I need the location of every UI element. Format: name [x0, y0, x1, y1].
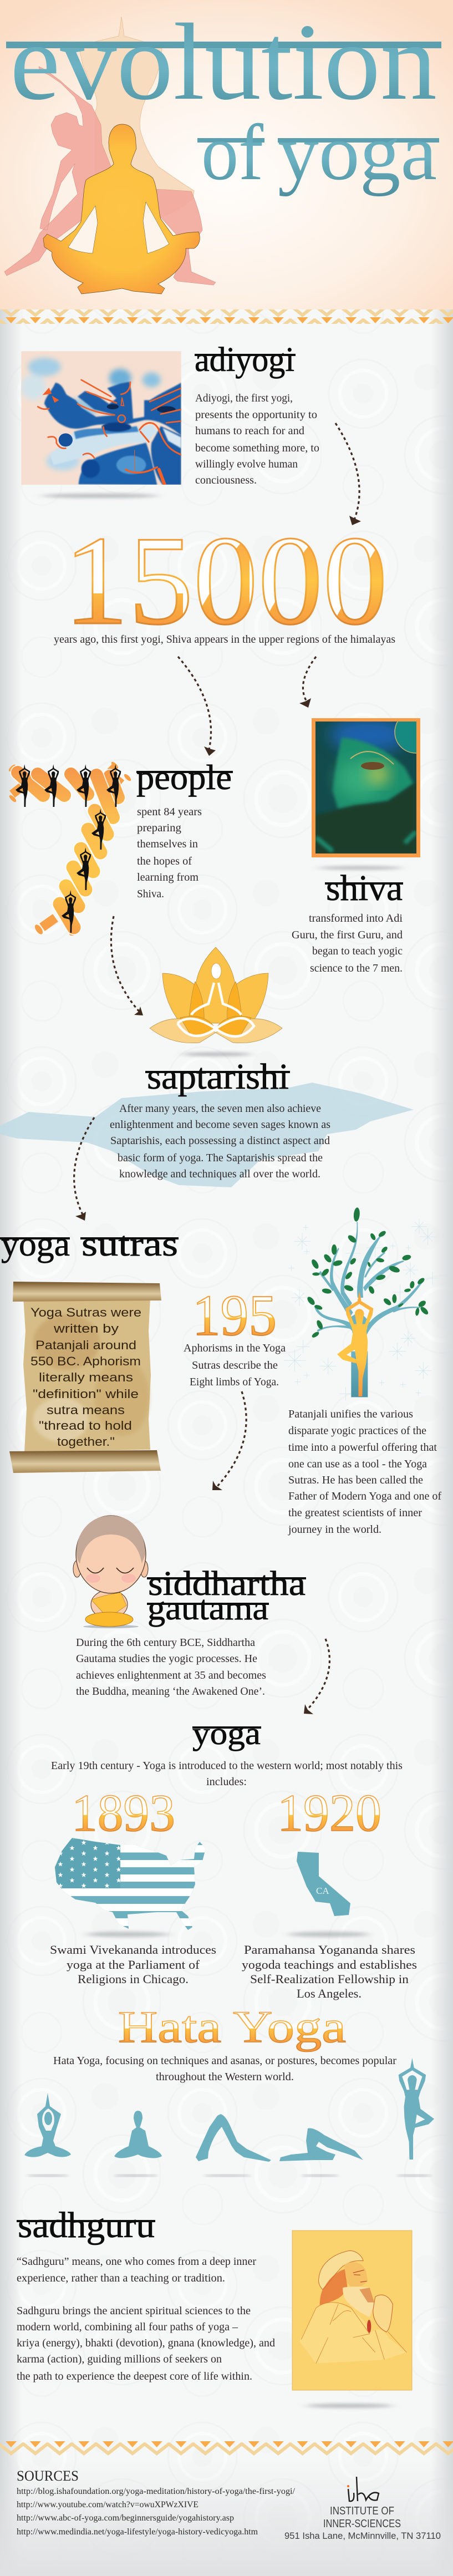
text: adiyogi description: humans to reach for and: [195, 425, 304, 437]
text: yoga intro: includes:: [206, 1776, 247, 1788]
title: of yoga: [197, 109, 439, 197]
text: patanjali description: Sutras. He has been called the: [288, 1474, 423, 1486]
text: adiyogi description: conciousness.: [195, 474, 257, 486]
heading: people: people: [136, 758, 232, 797]
text: shiva description: began to teach yogic: [312, 945, 403, 957]
text: vivekananda: yoga at the Parliament of: [67, 1958, 200, 1972]
text: yogananda: Paramahansa Yogananda shares: [244, 1943, 415, 1957]
scroll text: Patanjali around: [35, 1338, 136, 1352]
text: vivekananda: [50, 1943, 216, 1986]
arrow: to siddhartha: [212, 1391, 246, 1490]
heading: yoga sutras: yoga: [1, 1226, 70, 1263]
scroll text: "thread to hold: [39, 1419, 132, 1432]
text: saptarishi description: enlightenment and become seven sages known as: [110, 1119, 330, 1131]
scroll text: literally means: [39, 1370, 133, 1384]
title: Evolution: evolution: [10, 1, 437, 123]
scroll text: Yoga Sutras were: [30, 1305, 141, 1319]
zigzag divider top: [0, 309, 453, 324]
text: shiva description: transformed into Adi: [309, 912, 403, 924]
text: patanjali description: journey in the world.: [288, 1523, 381, 1536]
caption: 15000: years ago, this first yogi, Shiva appears in the upper regions of the himalayas: [54, 633, 395, 646]
stat: 195: 195: [192, 1283, 277, 1348]
text: yoga intro: [51, 1760, 403, 1788]
logo: isha institute: [284, 2477, 441, 2541]
icon: tree pose figure with sparkles: [284, 1207, 439, 1400]
text: sadhguru description: experience, rather than a teaching or tradition.: [17, 2272, 225, 2284]
scroll text: sutra means: [47, 1403, 125, 1417]
stat: 1893: 1893: [72, 1784, 175, 1842]
text: institute address: 951 Isha Lane, McMinnville, TN 37110: [284, 2531, 441, 2541]
scroll text: "definition" while: [33, 1387, 139, 1401]
text: siddhartha description: Gautama studies the yogic processes. He: [76, 1653, 257, 1665]
icon: california map: [297, 1852, 350, 1916]
icon: meditating monk: [73, 1516, 148, 1628]
text: yogananda: [242, 1943, 417, 2000]
text: adiyogi description: presents the opportunity to: [195, 409, 317, 421]
zigzag divider bottom: [0, 2441, 453, 2456]
shadow: [319, 866, 402, 870]
text: people description: the hopes of: [137, 855, 192, 867]
text: yogananda: Self-Realization Fellowship in: [250, 1972, 409, 1986]
text: sadhguru description: the path to experience the deepest core of life within.: [17, 2370, 252, 2382]
text: shiva description: science to the 7 men.: [310, 962, 403, 974]
text: sadhguru description: “Sadhguru” means, one who comes from a deep inner: [17, 2255, 256, 2268]
text: siddhartha description: [76, 1637, 266, 1698]
text: source links: http://www.abc-of-yoga.com/beginnersguide/yogahistory.asp: [17, 2513, 234, 2523]
portrait: sadhguru sketch: [292, 2230, 412, 2390]
text: aphorisms caption: Aphorisms in the Yoga: [184, 1342, 286, 1354]
panel: yoga sutras: [0, 1207, 441, 1536]
shadow california: [288, 1932, 368, 1937]
text: people description: spent 84 years: [137, 806, 202, 818]
header panel: [0, 0, 453, 309]
heading: siddhartha: siddhartha: [148, 1565, 306, 1603]
brush stroke background: [0, 1083, 414, 1187]
scroll text: 550 BC. Aphorism: [30, 1354, 141, 1368]
icon: isha script mark: [347, 2477, 379, 2501]
text: people description: learning from: [137, 871, 198, 883]
heading: sadhguru: sadhguru: [18, 2205, 155, 2245]
shadows under poses: [27, 2174, 432, 2177]
heading: yoga sutras: [0, 1226, 179, 1263]
icon: california map: CA: [316, 1886, 329, 1896]
text: patanjali description: disparate yogic practices of the: [288, 1425, 426, 1437]
title: of yoga: of: [201, 109, 263, 197]
panel: hata yoga: [24, 2001, 434, 2177]
shadow: [42, 494, 158, 498]
text: shiva description: [292, 912, 403, 974]
arrow: adiyogi to 15000: [335, 423, 361, 525]
scroll text: written by: [53, 1322, 119, 1335]
text: source links: http://blog.ishafoundation.org/yoga-meditation/history-of-yoga/the-first-yogi/: [17, 2487, 296, 2496]
scroll: [9, 1282, 161, 1473]
text: aphorisms caption: [184, 1342, 286, 1388]
yoga figures illustration: [4, 17, 216, 294]
text: yogananda: yogoda teachings and establishes: [242, 1958, 417, 1972]
text: saptarishi description: After many years, the seven men also achieve: [119, 1102, 321, 1115]
text: sadhguru description: [17, 2255, 275, 2382]
icon: lotus logo: [150, 947, 282, 1043]
text: hata yoga description: Hata Yoga, focusing on techniques and asanas, or postures, becomes popular: [53, 2055, 396, 2067]
icon: usa flag map: [55, 1838, 209, 1930]
panel: sources: [17, 2468, 296, 2537]
text: institute address: [284, 2505, 441, 2541]
text: siddhartha description: During the 6th century BCE, Siddhartha: [76, 1637, 255, 1649]
text: people description: Shiva.: [137, 888, 164, 900]
text: aphorisms caption: Eight limbs of Yoga.: [190, 1376, 279, 1388]
panel: saptarishi: [110, 947, 330, 1180]
panel: adiyogi: [21, 341, 319, 498]
text: saptarishi description: Saptarishis, each possessing a distinct aspect and: [110, 1135, 330, 1147]
arrow: to shiva: [299, 657, 316, 708]
text: adiyogi description: become something more, to: [195, 442, 319, 454]
stat: 1920: 1920: [277, 1784, 381, 1842]
text: sadhguru description: modern world, combining all four paths of yoga –: [17, 2321, 238, 2333]
text: people description: themselves in: [137, 838, 198, 850]
text: institute address: INSTITUTE OF: [330, 2505, 394, 2517]
text: yoga intro: Early 19th century - Yoga is introduced to the western world; most notably this: [51, 1760, 403, 1772]
arrow: to people: [178, 657, 216, 756]
icon: yoga poses: [24, 2058, 434, 2162]
text: patanjali description: one can use as a tool - the Yoga: [288, 1458, 427, 1470]
heading: sources: SOURCES: [17, 2468, 79, 2484]
text: patanjali description: Father of Modern Yoga and one of: [288, 1490, 441, 1502]
text: aphorisms caption: Sutras describe the: [192, 1359, 278, 1371]
text: siddhartha description: achieves enlightenment at 35 and becomes: [76, 1669, 266, 1681]
shadow: [182, 1053, 251, 1056]
scroll text: [30, 1305, 141, 1449]
heading: hata yoga: Hata Yoga: [118, 2001, 346, 2052]
text: hata yoga description: throughout the Western world.: [156, 2071, 294, 2083]
text: saptarishi description: [110, 1102, 330, 1180]
arrow: to yoga: [304, 1639, 329, 1714]
panel: yoga in the west: [50, 1715, 417, 2000]
text: patanjali description: time into a powerful offering that: [288, 1441, 437, 1454]
text: shiva description: Guru, the first Guru, and: [292, 929, 403, 941]
text: source links: [17, 2487, 296, 2537]
text: people description: preparing: [137, 822, 181, 834]
text: adiyogi description: willingly evolve human: [195, 458, 298, 470]
text: vivekananda: Swami Vivekananda introduces: [50, 1943, 216, 1957]
panel: siddhartha gautama: [73, 1516, 306, 1698]
heading: yoga: yoga: [192, 1715, 261, 1751]
arrow: to saptarishi: [111, 916, 143, 1015]
title: of yoga: yoga: [278, 109, 437, 197]
shadow: [306, 2404, 393, 2408]
text: hata yoga description: [53, 2055, 396, 2083]
text: patanjali description: the greatest scientists of inner: [288, 1507, 422, 1519]
heading: yoga sutras: sutras: [82, 1226, 178, 1263]
heading: adiyogi: adiyogi: [195, 341, 294, 379]
stat: 15000 years: 15000: [64, 510, 388, 651]
text: saptarishi description: basic form of yoga. The Saptarishis spread the: [118, 1152, 323, 1164]
text: institute address: INNER-SCIENCES: [323, 2518, 401, 2530]
shadow usa: [86, 1932, 169, 1937]
text: siddhartha description: the Buddha, meaning ‘the Awakened One’.: [76, 1685, 265, 1698]
scroll text: together.": [57, 1435, 115, 1449]
panel: sadhguru: [17, 2205, 412, 2408]
icon: braided number 7 with figures: [8, 761, 132, 937]
panel: 7 people: [8, 758, 233, 937]
panel: shiva: [292, 718, 420, 972]
text: sadhguru description: Sadhguru brings the ancient spiritual sciences to the: [17, 2305, 251, 2317]
text: adiyogi description: [195, 392, 319, 486]
painting: adiyogi: [21, 351, 181, 485]
text: sadhguru description: karma (action), guiding millions of seekers on: [17, 2353, 222, 2365]
text: adiyogi description: Adiyogi, the first yogi,: [195, 392, 293, 404]
text: saptarishi description: knowledge and techniques all over the world.: [119, 1168, 320, 1180]
text: source links: http://www.medindia.net/yoga-lifestyle/yoga-history-vedicyoga.htm: [17, 2527, 258, 2537]
heading: saptarishi: saptarishi: [147, 1056, 289, 1097]
heading: gautama: gautama: [147, 1589, 268, 1627]
heading: shiva: shiva: [326, 868, 403, 908]
text: patanjali description: [288, 1408, 441, 1536]
painting: shiva: [312, 718, 420, 857]
text: patanjali description: Patanjali unifies the various: [288, 1408, 413, 1420]
text: sadhguru description: kriya (energy), bhakti (devotion), gnana (knowledge), and: [17, 2337, 275, 2349]
text: people description: [137, 806, 202, 900]
text: yogananda: Los Angeles.: [297, 1986, 362, 2000]
arrow: to yoga sutras: [74, 1117, 94, 1221]
text: source links: http://www.youtube.com/watch?v=owuXPWzXIVE: [17, 2500, 198, 2509]
text: vivekananda: Religions in Chicago.: [78, 1972, 189, 1986]
